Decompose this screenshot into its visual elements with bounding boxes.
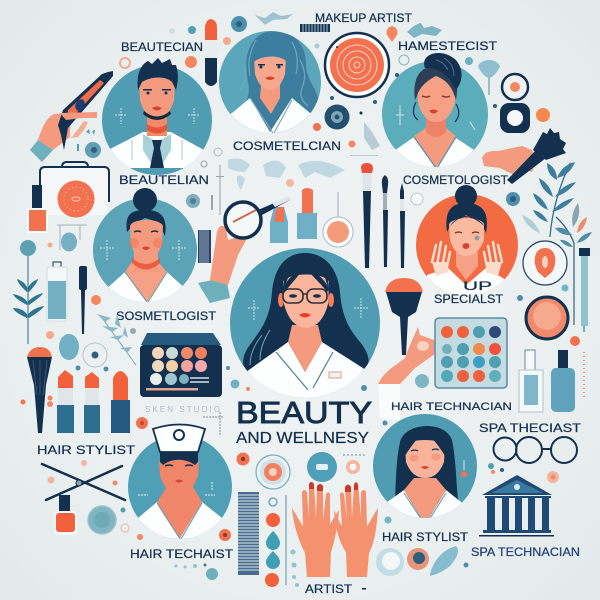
label: cosmetologist: COSMETOLOGIST — [403, 175, 508, 187]
label: up specialist — [434, 281, 503, 306]
label: beautecian: BEAUTECIAN — [121, 40, 203, 54]
label: spa theciast: SPA THECIAST — [479, 421, 582, 435]
icon: leaf plant — [522, 162, 576, 237]
icon: bag with orange circle — [40, 162, 109, 218]
decor: dotted right line — [583, 352, 585, 400]
icon: lipstick pair and peach compact — [270, 188, 423, 247]
icon: teal palette — [435, 318, 507, 388]
icon: comb — [198, 230, 211, 263]
icon: circle flower — [313, 104, 356, 148]
portrait: orange bun woman — [416, 185, 518, 296]
icon: orange nail polish — [54, 495, 77, 535]
icon: magnifier and hand — [198, 197, 290, 303]
icon: temple — [479, 475, 554, 536]
icon: eyeshadow palette — [140, 333, 222, 397]
label: up specialist: SPECIALST — [434, 294, 503, 306]
label: beautelian: BEAUTELIAN — [119, 173, 209, 187]
icon: swirl ring — [256, 455, 290, 489]
icon: peach ring — [343, 455, 365, 474]
icon: hand holding orange pen — [30, 71, 113, 162]
icon: leaf branch and ovals — [20, 314, 136, 404]
title: and wellness: AND WELLNESY — [236, 430, 369, 447]
icon: three lipsticks — [57, 370, 130, 433]
icon: right leaf branch — [555, 203, 592, 300]
icon: small teal ornaments — [361, 374, 429, 426]
portrait: man beautician — [102, 58, 212, 175]
icon: circled peach — [523, 241, 567, 285]
icon: small brush — [79, 266, 101, 334]
decor: top left dots — [120, 12, 293, 68]
decor: faded swirl — [350, 55, 497, 156]
decor: bottom teal bits — [174, 550, 299, 587]
icon: mid-left ornaments — [20, 225, 87, 344]
decor: dash — [362, 588, 366, 590]
icon: teal tube — [506, 192, 590, 332]
icon: orange compact — [325, 33, 389, 97]
icon: scissors — [42, 464, 125, 500]
icon: teal circle badge — [307, 452, 337, 482]
icon: bottle — [47, 262, 67, 321]
icon: comb strip — [300, 24, 330, 32]
icon: vertical comb — [238, 492, 259, 575]
icon: temple side dots — [384, 463, 559, 524]
icon: teal bottle — [551, 350, 575, 412]
icon: ornaments near scissors — [47, 401, 118, 486]
icon: orange rings beside nurse — [136, 417, 250, 541]
icon: big orange-tipped brush — [27, 347, 52, 433]
icon: serum bottle — [519, 350, 543, 412]
portrait: blue-haired woman — [219, 31, 321, 135]
portrait: central woman with glasses — [230, 248, 380, 400]
icon: brush and hand — [482, 128, 566, 184]
label: faded skin caption: SKEN STUDIO — [145, 405, 220, 414]
icon: bottom swatches — [376, 546, 468, 576]
label: hair stylist left: HAIR STYLIST — [37, 443, 136, 457]
portrait: bun woman — [382, 53, 488, 168]
icon: teal palm flower — [478, 60, 500, 95]
icon: colored drop column — [265, 495, 286, 587]
icon: top lipstick — [205, 19, 217, 86]
label: hametecist: HAMESTECIST — [398, 41, 497, 53]
label: up specialist: UP — [463, 281, 493, 293]
portrait: long-haired woman — [373, 414, 477, 525]
label: makeup artist: MAKEUP ARTIST — [315, 13, 412, 25]
icon: teal flower — [77, 129, 101, 158]
icon: three makeup brushes — [361, 163, 405, 268]
label: hair stylist right: HAIR STYLIST — [382, 532, 468, 544]
decor: marks beside palette — [203, 366, 250, 435]
label: spa technacian: SPA TECHNACIAN — [471, 547, 580, 559]
decor: top centre splashes — [314, 23, 442, 114]
portrait: nurse — [128, 424, 232, 545]
icon: orange-black round brush — [385, 278, 423, 355]
icon: right compact — [500, 74, 550, 133]
title: beauty: BEAUTY — [236, 395, 372, 430]
icon: left plant — [13, 279, 44, 318]
decor: faded squiggles — [186, 148, 345, 215]
icon: nail polish — [27, 185, 48, 233]
label: sosmetlogist: SOSMETLOGIST — [116, 311, 216, 323]
label: hair techaist: HAIR TECHAIST — [130, 549, 233, 561]
icon: orange compact 2 — [526, 297, 568, 339]
label: hair technacian: HAIR TECHNACIAN — [391, 401, 512, 413]
icon: orange dot — [570, 300, 580, 346]
portrait: left bun woman — [93, 188, 197, 305]
icon: teal swatch — [88, 506, 129, 534]
label: cosmetelcian: COSMETELCIAN — [233, 139, 341, 153]
label: artist: ARTIST — [305, 582, 353, 596]
icon: glasses — [494, 437, 577, 463]
icon: two hands with red nails — [292, 482, 378, 577]
icon: hand with palette swatches — [378, 327, 452, 420]
